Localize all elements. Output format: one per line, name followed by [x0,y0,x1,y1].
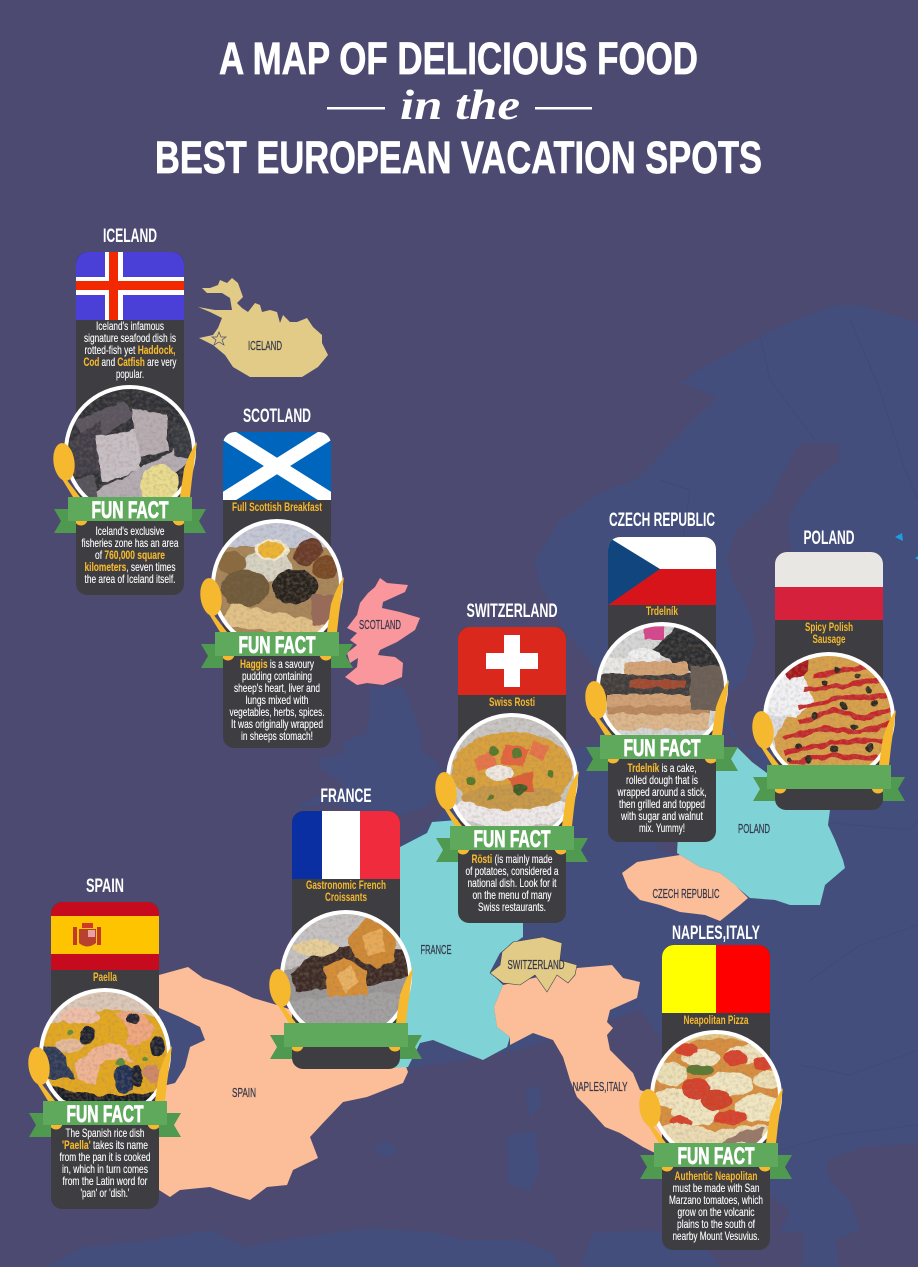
ribbon text: FUN FACT [624,735,701,762]
fun fact text: national dish. Look for it [468,876,557,890]
fun fact text: Haggis is a savoury [240,657,314,671]
country: Iceland [198,278,328,377]
photo: pizza [654,1034,778,1143]
panel: Czech Republic [583,510,738,842]
country: Italy [494,965,670,1155]
fun fact text: lungs mixed with [246,693,308,707]
description [84,319,176,381]
fun fact text: sheep's heart, liver and [234,681,320,695]
map labels: SPAIN [232,1085,256,1100]
map labels: ICELAND [248,338,282,353]
dish name: Croissants [325,890,367,904]
dish name: Paella [93,970,117,984]
icon: Reykjavik star [212,332,226,345]
fun fact text [466,852,559,914]
fun fact text: in sheeps stomach! [241,729,313,743]
flag: Iceland [76,252,184,320]
dish name [805,620,853,646]
description: signature seafood dish is [84,331,176,345]
fun fact text: from the Latin word for [62,1174,148,1188]
dish name: Trdelník [646,604,678,618]
panel: France: FRANCE [320,786,372,807]
photo: Scottish breakfast [215,523,339,632]
ribbon text: FUN FACT [92,497,169,524]
fun fact text: It was originally wrapped [231,717,323,731]
flag: Naples [662,945,770,1013]
small blue markers [895,533,918,560]
photo: Polish sausage [767,656,891,765]
dish name: Gastronomic French [306,878,386,892]
country: Czech Republic [622,855,748,921]
fun fact text [82,524,179,586]
fun fact text: the area of Iceland itself. [84,572,176,586]
fun fact text [230,657,324,743]
photo: rosti [450,717,574,826]
ribbon text: FUN FACT [238,632,316,659]
fun fact text: Trdelník is a cake, [628,761,696,775]
fun fact text: must be made with San [672,1181,760,1195]
dish name: Spicy Polish [805,620,853,634]
panel: Naples, Italy: NAPLES,ITALY [672,923,760,944]
panel: Spain: SPAIN [86,876,124,897]
panel: Poland [750,528,905,810]
dish name: Neapolitan Pizza [684,1013,749,1027]
fun fact text: with sugar and walnut [620,809,703,823]
photo: croissants [284,914,408,1023]
flag: Poland [775,552,883,620]
fun fact text [669,1169,763,1243]
faint borders [660,320,918,1150]
title: in the [400,83,520,129]
fun fact text: The Spanish rice dish [66,1126,144,1140]
panel: Switzerland: SWITZERLAND [466,601,558,622]
fun fact text: 'Paella' takes its name [62,1138,148,1152]
fun fact text [60,1126,150,1200]
flag: Scotland [223,432,331,500]
fun fact text: then grilled and topped [619,797,705,811]
fun fact text: from the pan it is cooked [60,1150,150,1164]
map labels: FRANCE [420,942,452,957]
description: Iceland's infamous [96,319,164,333]
fun fact text: fisheries zone has an area [82,536,179,550]
panel: Iceland: ICELAND [103,226,157,247]
flag: Switzerland [458,627,566,695]
description: Cod and Catfish are very [84,355,176,369]
fun fact text: Rösti (is mainly made [472,852,553,866]
panel: Scotland: SCOTLAND [243,406,311,427]
dish name: Sausage [812,632,846,646]
country: Scotland [345,578,420,685]
title [155,33,762,183]
country: Switzerland [490,937,577,992]
map labels [232,338,770,1100]
map labels: CZECH REPUBLIC [652,886,720,901]
ribbon text: FUN FACT [474,826,551,853]
faint land masses [47,305,918,1267]
photo: fermented fish [68,389,192,497]
country: Spain [159,967,408,1200]
panel: Scotland [198,406,353,748]
photo: trdelnik [600,626,724,735]
panel: Czech Republic: CZECH REPUBLIC [609,510,715,531]
panel: Spain [26,876,181,1209]
dish name: Swiss Rosti [489,695,535,709]
fun fact text: Iceland's exclusive [96,524,165,538]
fun fact text: grow on the volcanic [678,1205,754,1219]
fun fact text: pudding containing [242,669,312,683]
flag: Spain [51,902,159,970]
map labels: NAPLES,ITALY [572,1079,628,1094]
fun fact text: of 760,000 square [95,548,165,562]
fun fact text: Authentic Neapolitan [674,1169,758,1183]
fun fact text: kilometers, seven times [84,560,176,574]
fun fact text: plains to the south of [677,1217,755,1231]
map labels: SCOTLAND [359,617,401,632]
description: popular. [116,367,144,381]
country: Poland [677,747,845,905]
panel: Iceland [51,226,206,595]
photo: paella [43,992,167,1101]
fun fact text: of potatoes, considered a [466,864,559,878]
country: France [340,820,523,1068]
panel: Poland: POLAND [804,528,854,549]
map labels: POLAND [738,821,770,836]
Baltic Sea [720,443,840,760]
fun fact text: 'pan' or 'dish.' [80,1186,130,1200]
ribbon text: FUN FACT [66,1101,144,1128]
fun fact text: wrapped around a stick, [617,785,706,799]
panel: Naples, Italy [637,923,792,1250]
fun fact text: vegetables, herbs, spices. [230,705,324,719]
description: rotted-fish yet Haddock, [84,343,176,357]
fun fact text: rolled dough that is [626,773,698,787]
dish name: Full Scottish Breakfast [232,500,322,514]
title: A MAP OF DELICIOUS FOOD [219,33,698,84]
fun fact text: Marzano tomatoes, which [669,1193,763,1207]
fun fact text: Swiss restaurants. [478,900,546,914]
map labels: SWITZERLAND [508,957,564,972]
ribbon text: FUN FACT [678,1143,755,1170]
fun fact text: in, which in turn comes [62,1162,148,1176]
fun fact text: nearby Mount Vesuvius. [672,1229,760,1243]
fun fact text: on the menu of many [472,888,552,902]
fun fact text [617,761,706,835]
flag: France [292,811,400,879]
flag: Czech Republic [608,537,716,605]
fun fact text: mix. Yummy! [639,821,685,835]
map of Europe [47,278,918,1267]
panel: Switzerland [433,601,588,923]
panel: France [267,786,422,1069]
dish name [306,878,386,904]
